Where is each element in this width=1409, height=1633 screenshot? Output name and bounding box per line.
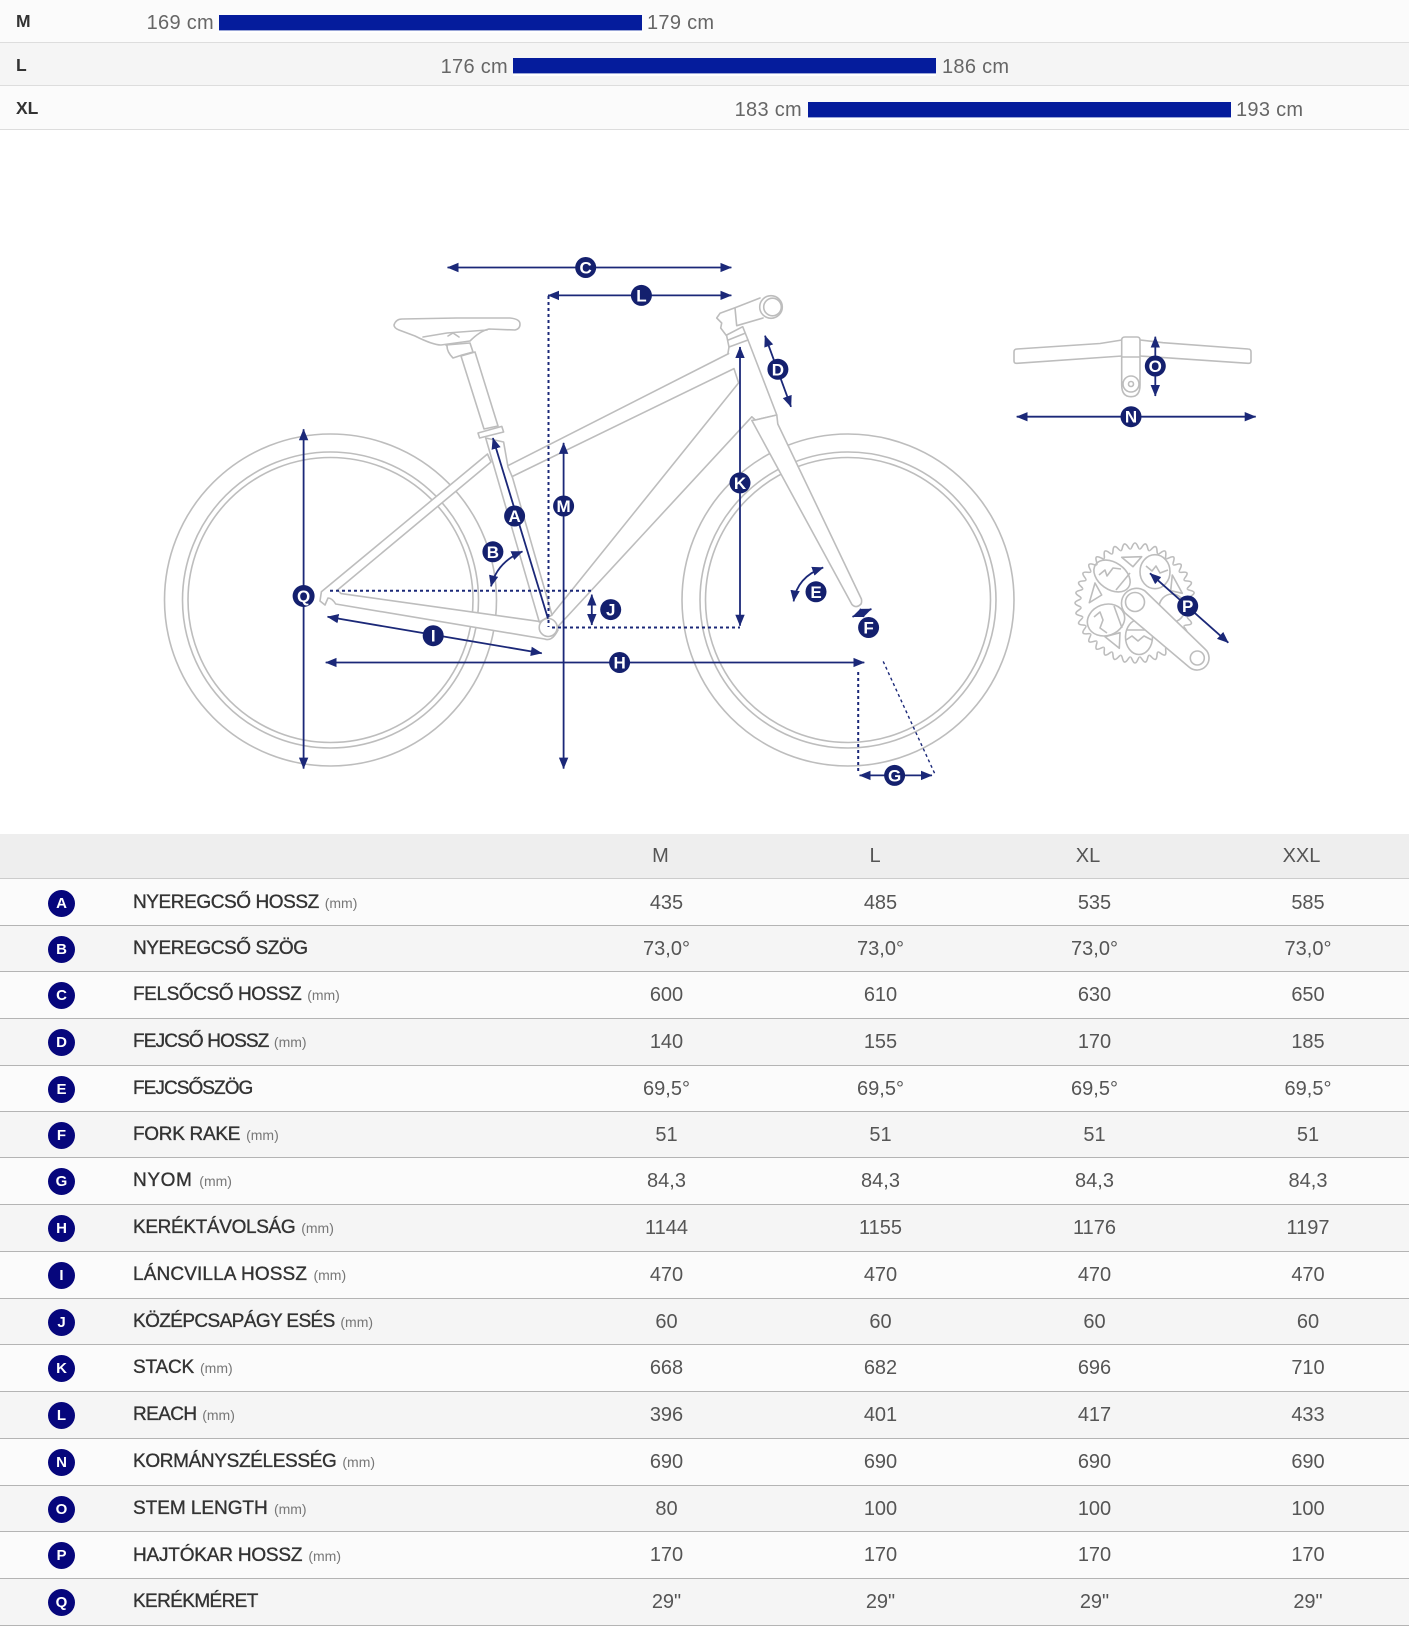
badge F: F	[57, 1127, 66, 1144]
min height L: 176 cm	[441, 56, 508, 78]
badge G: G	[888, 766, 901, 785]
row Q: 29"	[1080, 1591, 1109, 1613]
dimension P	[1150, 573, 1228, 643]
row I: 470	[1291, 1264, 1325, 1286]
row N: 690	[864, 1451, 897, 1473]
badge Q: Q	[297, 587, 310, 606]
badge P	[48, 1542, 75, 1569]
values H	[645, 1217, 1330, 1239]
badge C	[48, 982, 75, 1009]
header L: L	[869, 845, 881, 867]
row K: 696	[1078, 1357, 1111, 1379]
row H	[0, 1205, 1409, 1252]
badge A	[504, 506, 525, 526]
dimension arrow lines	[304, 268, 932, 775]
values F	[655, 1124, 1319, 1146]
badge C: C	[580, 258, 592, 278]
row J: 60	[1083, 1311, 1106, 1333]
seat tube	[486, 438, 552, 622]
chainring teeth	[1059, 531, 1211, 675]
row K	[0, 1345, 1409, 1392]
row A: 585	[1291, 892, 1325, 914]
row H: 1155	[859, 1217, 902, 1239]
row A: 485	[864, 892, 897, 914]
row G: 84,3	[647, 1170, 686, 1192]
row A	[0, 879, 1409, 926]
row B: 73,0°	[857, 938, 904, 960]
badge J	[600, 599, 621, 620]
values J	[655, 1311, 1319, 1333]
row F: 51	[655, 1124, 678, 1146]
values G	[647, 1170, 1327, 1192]
fork	[752, 415, 862, 607]
panel: geometry diagram	[164, 257, 1256, 786]
row H: 1144	[645, 1217, 688, 1239]
row A: 435	[650, 892, 683, 914]
front wheel	[682, 434, 1014, 766]
stem and headset	[717, 296, 782, 347]
badge B	[48, 936, 75, 963]
row Q	[0, 1579, 1409, 1626]
label P: HAJTÓKAR HOSSZ (mm)	[133, 1545, 341, 1566]
values L	[650, 1404, 1325, 1426]
row L: 396	[650, 1404, 683, 1426]
badge C: C	[56, 987, 67, 1004]
min height XL: 183 cm	[735, 99, 802, 121]
row F: 51	[1297, 1124, 1319, 1146]
row D: 170	[1078, 1031, 1111, 1053]
badge D	[48, 1029, 75, 1056]
header M: M	[652, 845, 669, 867]
row G: 84,3	[1289, 1170, 1327, 1192]
row L: 417	[1078, 1404, 1111, 1426]
badge I: I	[431, 627, 436, 646]
badge L: L	[636, 286, 647, 305]
row P: 170	[650, 1544, 683, 1566]
row D: 140	[650, 1031, 683, 1053]
saddle	[394, 318, 520, 358]
label A: NYEREGCSŐ HOSSZ (mm)	[133, 892, 357, 913]
label B: NYEREGCSŐ SZÖG	[133, 938, 308, 959]
badge D: D	[56, 1034, 67, 1051]
table header row	[0, 834, 1409, 879]
row: size XL height range	[0, 86, 1409, 130]
badge O: O	[56, 1501, 67, 1518]
size label L: L	[16, 55, 27, 75]
values I	[650, 1264, 1325, 1286]
row N: 690	[1078, 1451, 1111, 1473]
row B: 73,0°	[1285, 938, 1331, 960]
row C: 650	[1291, 984, 1325, 1006]
row P	[0, 1532, 1409, 1579]
max height M: 179 cm	[647, 12, 714, 34]
badge F	[858, 617, 879, 638]
header XL: XL	[1076, 845, 1100, 867]
row I: 470	[864, 1264, 897, 1286]
row G	[0, 1158, 1409, 1205]
badge P: P	[56, 1547, 66, 1564]
label Q: KERÉKMÉRET	[133, 1591, 258, 1612]
row P: 170	[1291, 1544, 1325, 1566]
badge Q: Q	[56, 1594, 67, 1611]
row J	[0, 1299, 1409, 1345]
badge A: A	[56, 895, 67, 912]
dimension N	[1017, 406, 1256, 427]
badge N	[48, 1449, 75, 1476]
badge B	[482, 541, 503, 562]
min height M: 169 cm	[147, 12, 214, 34]
label O: STEM LENGTH (mm)	[133, 1498, 307, 1519]
row O: 100	[1078, 1498, 1111, 1520]
label H: KERÉKTÁVOLSÁG (mm)	[133, 1217, 334, 1238]
dimension P: P	[1182, 597, 1193, 616]
row Q: 29"	[1293, 1591, 1323, 1613]
dimension O: O	[1149, 357, 1162, 376]
size label XL: XL	[16, 98, 38, 118]
row K: 668	[650, 1357, 683, 1379]
badge Q	[293, 585, 315, 607]
row E: 69,5°	[643, 1078, 690, 1100]
badge I	[423, 625, 444, 646]
row E: 69,5°	[1285, 1078, 1331, 1100]
values E	[643, 1078, 1331, 1100]
badge G: G	[56, 1173, 67, 1190]
label C: FELSŐCSŐ HOSSZ (mm)	[133, 984, 340, 1005]
values A	[650, 892, 1325, 914]
row F: 51	[1083, 1124, 1106, 1146]
label D: FEJCSŐ HOSSZ (mm)	[133, 1031, 307, 1052]
handlebar drawing	[1014, 337, 1251, 397]
badge F: F	[863, 618, 874, 638]
down tube	[552, 383, 739, 615]
panel: rider height ranges	[0, 11, 1409, 130]
badge H	[609, 652, 630, 673]
row K: 682	[864, 1357, 897, 1379]
row: size M height range	[0, 0, 1409, 43]
badge G	[48, 1168, 75, 1195]
badge C	[575, 257, 596, 278]
row L: 433	[1291, 1404, 1325, 1426]
values N	[650, 1451, 1325, 1473]
row E	[0, 1066, 1409, 1112]
crank arm	[1121, 588, 1209, 670]
row C	[0, 972, 1409, 1019]
label N: KORMÁNYSZÉLESSÉG (mm)	[133, 1451, 375, 1472]
row H: 1197	[1286, 1217, 1330, 1239]
row G: 84,3	[1075, 1170, 1114, 1192]
row O	[0, 1486, 1409, 1532]
badge B: B	[56, 941, 67, 958]
values P	[650, 1544, 1325, 1566]
row I: 470	[650, 1264, 683, 1286]
row L: 401	[864, 1404, 897, 1426]
label L: REACH (mm)	[133, 1404, 235, 1425]
chainring cut-outs	[1083, 553, 1185, 654]
row C: 600	[650, 984, 683, 1006]
row O: 100	[864, 1498, 897, 1520]
badge L	[48, 1402, 75, 1429]
badge M: M	[557, 497, 571, 516]
row N: 690	[1291, 1451, 1325, 1473]
range bar L	[513, 58, 936, 73]
values Q	[652, 1591, 1323, 1613]
row C: 630	[1078, 984, 1111, 1006]
panel: geometry table	[0, 834, 1409, 1626]
badge D	[767, 359, 788, 380]
row L	[0, 1392, 1409, 1439]
badge E	[48, 1076, 75, 1103]
row A: 535	[1078, 892, 1111, 914]
badge G	[884, 765, 905, 786]
row P: 170	[864, 1544, 897, 1566]
dimension N: N	[1125, 408, 1137, 427]
badge E	[806, 581, 826, 602]
badge E: E	[810, 583, 822, 602]
badge I	[48, 1262, 75, 1289]
seat collar	[478, 426, 504, 438]
row D: 185	[1291, 1031, 1325, 1053]
seat post	[461, 352, 498, 429]
label E: FEJCSŐSZÖG	[133, 1078, 252, 1099]
row E: 69,5°	[1071, 1078, 1118, 1100]
row B: 73,0°	[1071, 938, 1118, 960]
badge A	[48, 890, 75, 917]
badge J: J	[606, 601, 615, 620]
row F: 51	[869, 1124, 892, 1146]
badge K: K	[56, 1360, 67, 1377]
row I	[0, 1252, 1409, 1299]
crankset drawing	[1059, 531, 1211, 675]
range bar M	[219, 15, 642, 30]
badge A: A	[508, 507, 521, 526]
row G: 84,3	[861, 1170, 900, 1192]
badge K	[730, 472, 750, 493]
size label M: M	[16, 11, 31, 31]
values C	[650, 984, 1325, 1006]
badge J	[48, 1309, 75, 1336]
header XXL: XXL	[1283, 845, 1320, 867]
row N	[0, 1439, 1409, 1486]
row F	[0, 1112, 1409, 1158]
badge H: H	[613, 654, 626, 672]
values K	[650, 1357, 1325, 1379]
row H: 1176	[1073, 1217, 1116, 1239]
badge F	[48, 1122, 75, 1149]
label K: STACK (mm)	[133, 1357, 233, 1378]
row O: 100	[1291, 1498, 1325, 1520]
row N: 690	[650, 1451, 683, 1473]
row D	[0, 1019, 1409, 1066]
max height XL: 193 cm	[1236, 99, 1303, 121]
label G: NYOM (mm)	[133, 1170, 232, 1191]
row Q: 29"	[866, 1591, 895, 1613]
badge M	[553, 496, 574, 516]
row C: 610	[864, 984, 897, 1006]
label J: KÖZÉPCSAPÁGY ESÉS (mm)	[133, 1311, 373, 1332]
badge L	[631, 285, 652, 306]
row K: 710	[1291, 1357, 1325, 1379]
rear wheel	[164, 434, 496, 766]
badge D: D	[772, 360, 784, 379]
badge E: E	[56, 1081, 66, 1098]
row J: 60	[655, 1311, 678, 1333]
label I: LÁNCVILLA HOSSZ (mm)	[133, 1264, 346, 1285]
row J: 60	[869, 1311, 892, 1333]
dotted reference lines	[330, 296, 936, 776]
badge Q	[48, 1589, 75, 1616]
values O	[655, 1498, 1325, 1520]
badge K	[48, 1355, 75, 1382]
row E: 69,5°	[857, 1078, 904, 1100]
row I: 470	[1078, 1264, 1111, 1286]
row J: 60	[1297, 1311, 1319, 1333]
row B	[0, 926, 1409, 972]
label F: FORK RAKE (mm)	[133, 1124, 279, 1145]
rear stays and dropout	[320, 454, 558, 640]
row D: 155	[864, 1031, 897, 1053]
badge O	[48, 1496, 75, 1523]
badge H: H	[56, 1220, 67, 1237]
max height L: 186 cm	[942, 56, 1009, 78]
row P: 170	[1078, 1544, 1111, 1566]
head tube	[728, 340, 777, 420]
values D	[650, 1031, 1325, 1053]
badge N: N	[56, 1454, 67, 1471]
top tube	[508, 354, 729, 466]
badge J: J	[57, 1314, 66, 1331]
range bar XL	[808, 102, 1231, 117]
bike drawing	[164, 296, 1014, 766]
row O: 80	[655, 1498, 678, 1520]
badge L: L	[57, 1407, 66, 1424]
row Q: 29"	[652, 1591, 681, 1613]
row: size L height range	[0, 43, 1409, 86]
bottom bracket	[539, 618, 557, 636]
row B: 73,0°	[643, 938, 690, 960]
badge K: K	[734, 474, 747, 493]
values B	[643, 938, 1331, 960]
badge B: B	[487, 543, 499, 562]
dimension O	[1145, 337, 1166, 396]
badge H	[48, 1215, 75, 1242]
badge I: I	[59, 1267, 64, 1284]
